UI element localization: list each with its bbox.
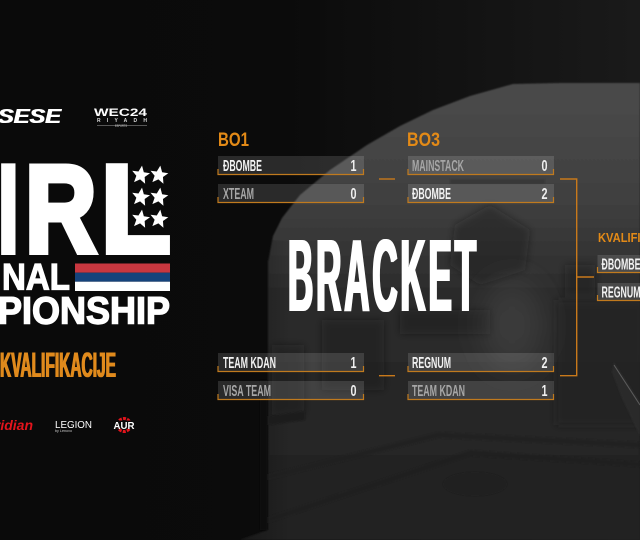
heading: BO1: BO1	[218, 130, 249, 151]
sponsor: Legion: by Lenovo	[55, 429, 72, 433]
match: REGNUM vs TEAM KDAN: TEAM KDAN	[412, 383, 465, 400]
match: REGNUM vs TEAM KDAN: 2	[542, 355, 548, 372]
qualified teams	[598, 255, 640, 302]
match: DBOMBE vs XTEAM: XTEAM	[223, 186, 254, 203]
match: TEAM KDAN vs VISA TEAM: 0	[350, 383, 357, 400]
match: DBOMBE vs XTEAM: ĐBOMBE	[223, 158, 262, 175]
match: TEAM KDAN vs VISA TEAM	[218, 353, 364, 400]
match: MAINSTACK vs DBOMBE: 2	[542, 186, 548, 203]
logo: IRL wordmark	[0, 139, 171, 279]
match: MAINSTACK vs DBOMBE: 0	[542, 158, 548, 175]
match: MAINSTACK vs DBOMBE: MAINSTACK	[412, 158, 464, 175]
logo: stars	[131, 164, 169, 228]
match: REGNUM vs TEAM KDAN	[408, 353, 554, 400]
connector: BO3 to qualified	[560, 179, 594, 376]
heading: BO3: BO3	[407, 130, 440, 151]
logo: PIONSHIP line: PIONSHIP	[0, 290, 170, 332]
match: REGNUM vs TEAM KDAN: REGNUM	[412, 355, 451, 372]
logo: WEC24 Riyadh: ESPORTS	[115, 124, 127, 128]
connector: BO1 bottom to BO3	[379, 375, 395, 377]
match: DBOMBE vs XTEAM: 1	[350, 158, 357, 175]
sponsor: AUR: AUR	[114, 421, 135, 432]
match: MAINSTACK vs DBOMBE: ĐBOMBE	[412, 186, 451, 203]
heading: BRACKET: BRACKET	[288, 219, 479, 334]
match: DBOMBE vs XTEAM	[218, 156, 364, 203]
logo: NAL line: NAL	[2, 256, 70, 298]
connector: BO1 top to BO3	[379, 178, 395, 180]
match: DBOMBE vs XTEAM: 0	[350, 186, 357, 203]
flag stripes	[75, 264, 170, 291]
match: MAINSTACK vs DBOMBE	[408, 156, 554, 203]
match: REGNUM vs TEAM KDAN: 1	[542, 383, 548, 400]
background: arch scene	[240, 83, 640, 540]
logo: IRL wordmark: R	[25, 139, 97, 279]
logo: WEC24 Riyadh: RIYADH	[97, 118, 147, 124]
match: TEAM KDAN vs VISA TEAM: TEAM KDAN	[223, 355, 276, 372]
logo: IRL wordmark: L	[101, 141, 171, 279]
match: TEAM KDAN vs VISA TEAM: VISA TEAM	[223, 383, 271, 400]
logo: WEC24 Riyadh: WEC24	[94, 107, 148, 119]
sponsor: Legion: LEGION	[55, 419, 92, 431]
logo: WEC24 Riyadh	[94, 107, 148, 128]
match: TEAM KDAN vs VISA TEAM: 1	[350, 355, 357, 372]
infographic canvas: KVALIFIKACIJE	[0, 345, 116, 385]
